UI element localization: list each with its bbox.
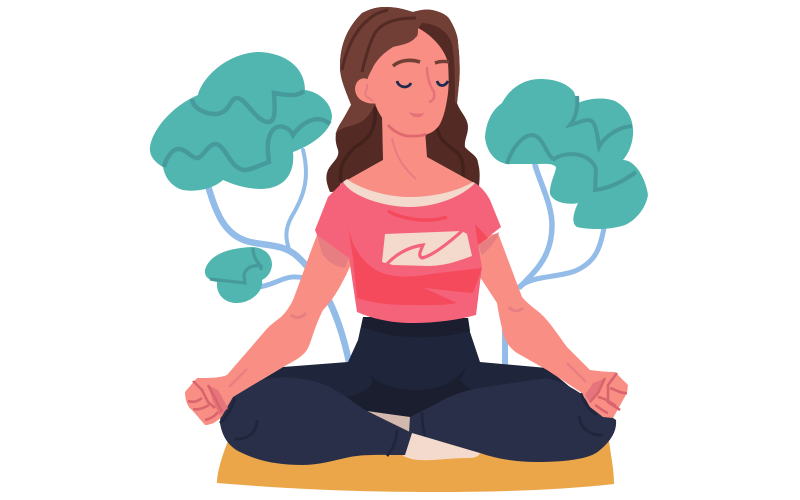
right tree canopy [485, 79, 648, 229]
face shape [367, 28, 449, 136]
hair dark base [326, 7, 480, 192]
shirt logo [382, 230, 472, 266]
right sleeve shading [475, 224, 488, 245]
right closed eye [437, 81, 448, 86]
ear [355, 78, 378, 104]
waistband [362, 317, 470, 337]
neck and chest [340, 115, 480, 215]
hip shadow [347, 360, 477, 417]
right tree canopy folds [507, 96, 636, 190]
right sleeve shadow [478, 232, 499, 255]
right elbow mark [509, 307, 523, 311]
chest crease [388, 211, 447, 220]
neck line [392, 138, 416, 179]
leg creases [220, 393, 603, 456]
jaw shadow [388, 125, 426, 136]
small canopy folds [210, 248, 261, 283]
right arm shape [472, 233, 628, 418]
hair light wave [335, 103, 375, 135]
hair light crown [340, 7, 460, 107]
left eyebrow [393, 60, 420, 66]
shirt shading [348, 227, 482, 305]
left elbow mark [291, 313, 306, 317]
right tree [485, 79, 648, 366]
mouth [409, 112, 424, 117]
leggings upper body [233, 317, 590, 430]
right eyebrow [435, 61, 449, 63]
shirt [315, 179, 501, 323]
left leg [220, 377, 412, 465]
face [355, 28, 449, 136]
shirt body [315, 182, 501, 323]
right forearm line [567, 363, 586, 382]
yoga mat [217, 441, 614, 492]
left tree main canopy [150, 52, 332, 191]
inner ear [365, 84, 373, 101]
collar [343, 179, 475, 207]
foot front [403, 433, 480, 460]
leggings torso and thighs [233, 317, 590, 430]
left closed eye [397, 81, 411, 87]
hair [326, 7, 480, 192]
left arm shape [185, 235, 353, 425]
right fist [585, 373, 627, 413]
left tree [150, 52, 349, 362]
right finger lines [590, 373, 627, 413]
left forearm line [229, 369, 247, 387]
left tree canopy folds [164, 91, 330, 170]
left fist [188, 381, 228, 420]
nose [427, 67, 434, 102]
right arm [472, 232, 628, 418]
left finger lines [188, 381, 222, 420]
right palm shadow [585, 379, 604, 403]
hair strands [340, 10, 463, 182]
left tree stems [208, 150, 349, 362]
logo panel [382, 231, 472, 266]
left arm [185, 235, 353, 425]
left palm shadow [208, 385, 228, 416]
small left canopy [205, 247, 272, 303]
right leg [409, 378, 616, 462]
foot back [367, 411, 410, 433]
right tree stems [505, 165, 604, 366]
left sleeve shadow [317, 235, 349, 268]
logo zigzag [387, 230, 463, 264]
